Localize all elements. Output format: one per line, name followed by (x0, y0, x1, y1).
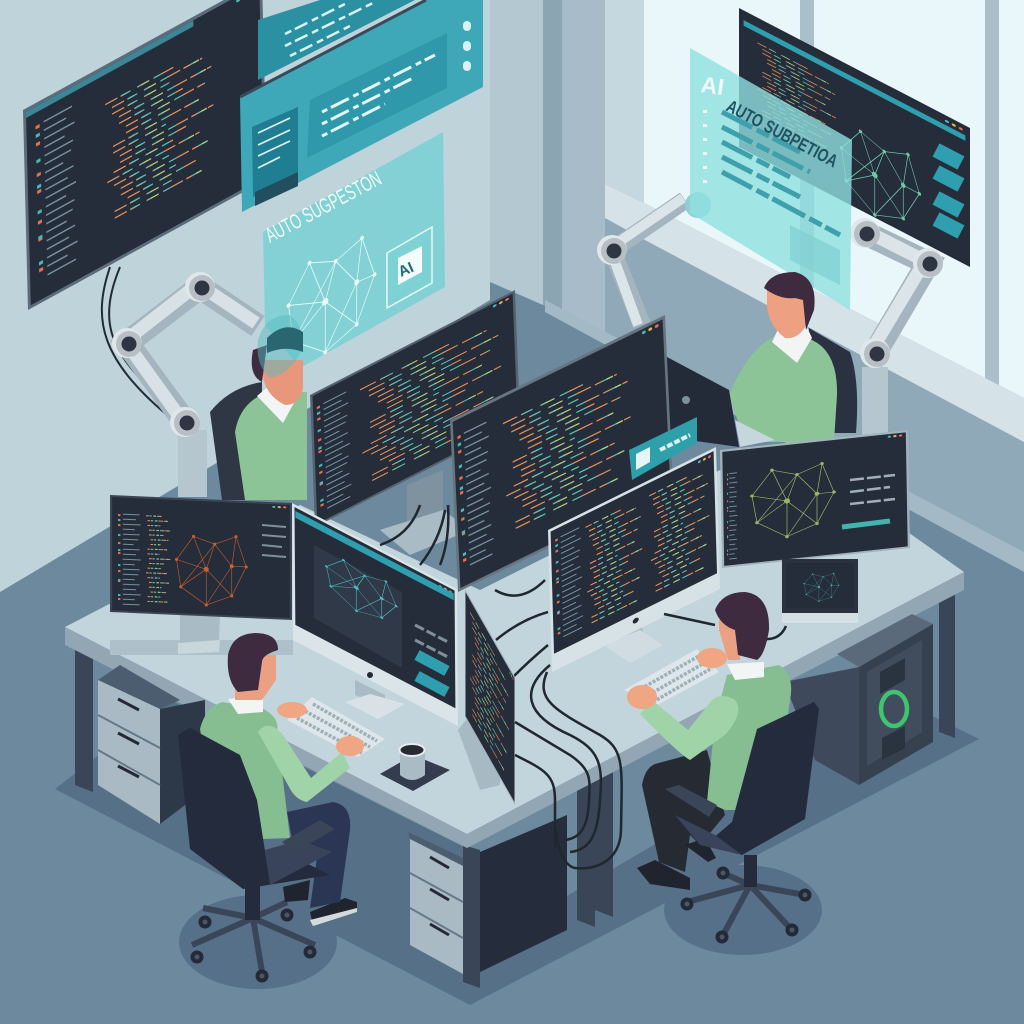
wall cables (102, 267, 173, 420)
torso (200, 702, 290, 839)
person top right (729, 272, 857, 442)
back cables (380, 505, 548, 678)
shoes (283, 880, 357, 926)
monitor: back left code (310, 290, 520, 527)
green power ring (881, 692, 907, 726)
laptop back right (667, 357, 775, 447)
heading: auto suggestion: AUTO SUGPESTON (262, 167, 385, 247)
worker front left (178, 633, 364, 989)
floor shadow (55, 700, 979, 1005)
hologram panel left: auto suggestion (262, 132, 445, 371)
cable to tablet (664, 614, 786, 639)
monitor: left front network (110, 495, 292, 620)
center filing cabinet (408, 815, 567, 974)
wall monitor: network right (739, 8, 970, 267)
monitor: front angled data (292, 503, 458, 726)
desk cables (515, 665, 622, 868)
trousers (642, 750, 725, 872)
keyboard left (287, 697, 385, 757)
arm (640, 696, 738, 760)
cyan panel top (258, 0, 415, 80)
collar and neck (228, 695, 263, 714)
tablet (782, 559, 858, 623)
trousers (287, 802, 350, 908)
chair shadow (179, 895, 337, 989)
head (715, 592, 769, 660)
window (605, 0, 1024, 442)
shoes (637, 860, 690, 890)
keyboard right (624, 649, 719, 705)
chair base (190, 885, 316, 982)
hands (277, 702, 364, 756)
monitor stand front (345, 680, 405, 719)
robot arm far right (850, 218, 943, 435)
label: AI: AI (699, 71, 726, 100)
worker front right (627, 592, 822, 955)
heading: auto suggestion: AUTO SUBPETIOA (723, 96, 841, 171)
wall monitor: code editor left (23, 0, 267, 310)
small floating teal tag (629, 417, 697, 480)
desk legs (75, 585, 955, 988)
chair shadow (664, 865, 822, 955)
PC tower (784, 614, 933, 785)
collar (727, 662, 764, 680)
coffee mug on coaster (380, 744, 450, 791)
monitor stand left (178, 615, 220, 654)
monitor stand right (603, 615, 663, 663)
cyan panel middle (240, 0, 483, 212)
left filing cabinet (98, 665, 205, 824)
robot arm left (112, 272, 258, 497)
desk (55, 470, 979, 1005)
head (228, 633, 278, 700)
monitor: narrow side code (458, 589, 515, 805)
AI chip icon (387, 227, 432, 308)
chair back (178, 728, 330, 889)
monitor: right center code (548, 447, 720, 672)
arm (258, 726, 350, 802)
chair base (680, 855, 812, 944)
monitor: right network (720, 430, 910, 568)
hands (627, 648, 727, 709)
hologram panel right: auto suggestion (690, 48, 852, 310)
chair back (712, 702, 819, 855)
person top left (210, 315, 307, 500)
monitor: center code (450, 315, 673, 592)
robot arm right window (597, 192, 711, 325)
torso (707, 665, 791, 810)
AI chip icon: AI (396, 259, 416, 281)
monitor stand back (380, 470, 470, 555)
